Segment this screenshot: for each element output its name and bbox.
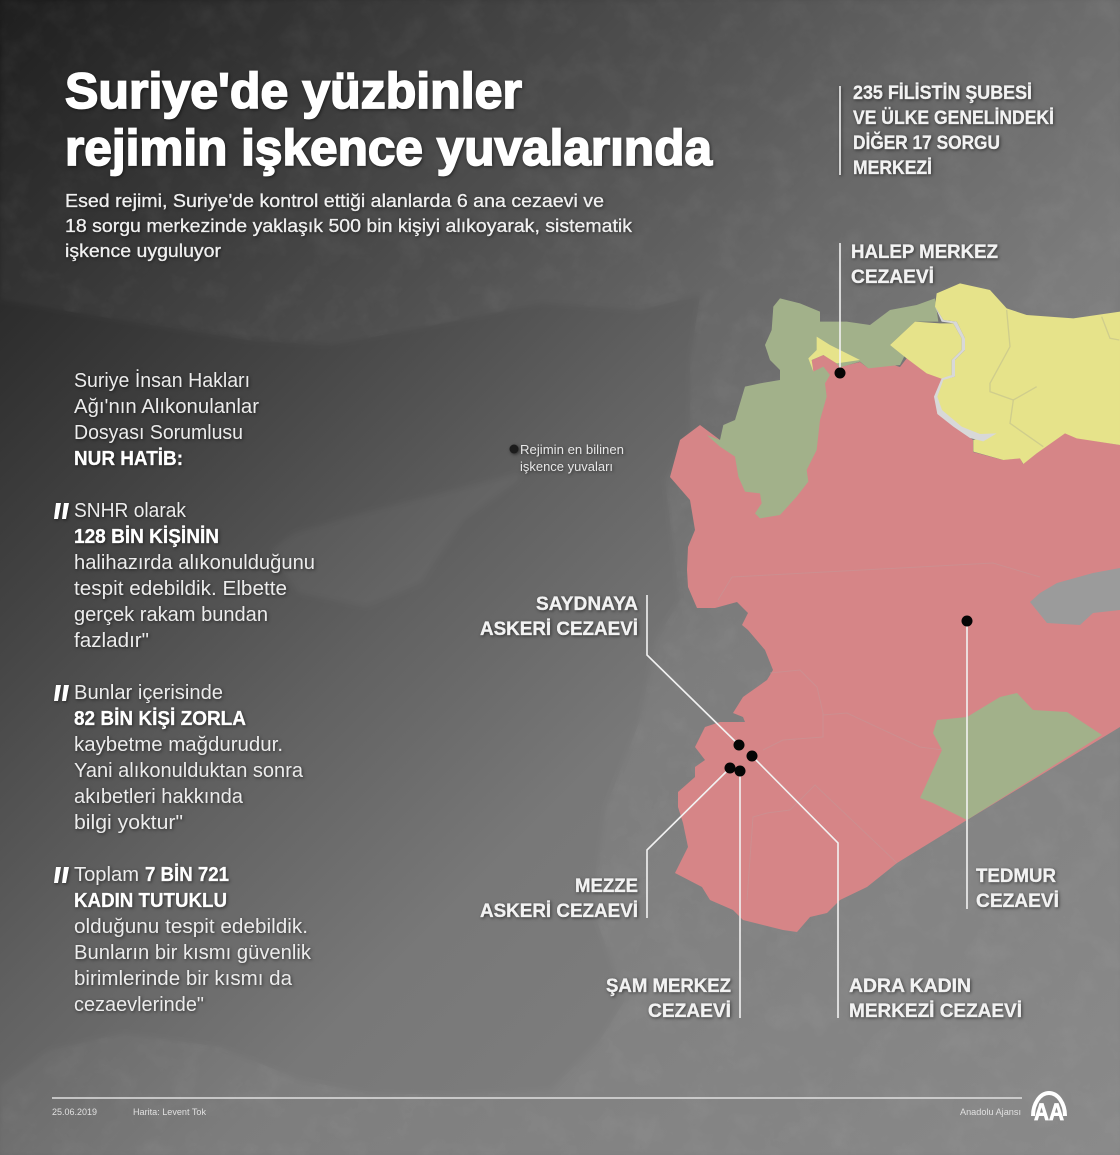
label: Saydnaya Askeri Cezaevi xyxy=(480,594,744,750)
label: Mezze Askeri Cezaevi: ASKERİ CEZAEVİ xyxy=(480,901,638,922)
label: Adra Kadın Merkezi Cezaevi: MERKEZİ CEZAEVİ xyxy=(849,1001,1022,1022)
region: eastern opposition area (green) xyxy=(920,693,1102,820)
title xyxy=(65,63,713,176)
legend: known torture sites: işkence yuvaları xyxy=(520,459,613,474)
quote: 128 bin: tespit edebildik. Elbette xyxy=(74,578,287,600)
callout: Filistin branch and interrogation centres: DİĞER 17 SORGU xyxy=(853,132,1000,154)
quote: 128 bin xyxy=(54,500,315,652)
quote: 7 bin 721: cezaevlerinde" xyxy=(74,994,204,1016)
label: Adra Kadın Merkezi Cezaevi xyxy=(746,750,1022,1022)
quote: 7 bin 721: KADIN TUTUKLU xyxy=(74,890,227,912)
quote: 128 bin: fazladır" xyxy=(74,630,149,652)
text block: source introduction: NUR HATİB: xyxy=(74,447,183,470)
label: Halep Merkez Cezaevi: HALEP MERKEZ xyxy=(851,242,998,263)
label: Mezze Askeri Cezaevi xyxy=(480,762,736,922)
region: regime-held area (red) xyxy=(670,355,1120,932)
label: Saydnaya Askeri Cezaevi: SAYDNAYA xyxy=(536,594,638,615)
label: Tedmur Cezaevi: CEZAEVİ xyxy=(976,891,1059,912)
quote: 7 bin 721: Toplam xyxy=(74,864,139,886)
region: lake and river (light grey) xyxy=(934,307,997,441)
callout: Filistin branch and interrogation centres xyxy=(840,83,1054,179)
quote: 128 bin: gerçek rakam bundan xyxy=(74,604,268,626)
label: Şam Merkez Cezaevi xyxy=(606,766,746,1022)
quote: 128 bin: 128 BİN KİŞİNİN xyxy=(74,525,219,548)
quote: 82 bin: kaybetme mağdurudur. xyxy=(74,734,283,756)
icon: quotation mark xyxy=(54,867,69,883)
subtitle: 18 sorgu merkezinde yaklaşık 500 bin kişiyi alıkoyarak, sistematik xyxy=(65,216,633,236)
label: Adra Kadın Merkezi Cezaevi: ADRA KADIN xyxy=(849,976,971,997)
footer: Anadolu Ajansı xyxy=(960,1107,1021,1118)
region: northern SDF areas (yellow) xyxy=(808,283,1120,464)
region: internal borders xyxy=(718,563,1040,900)
subtitle: Esed rejimi, Suriye'de kontrol ettiği alanlarda 6 ana cezaevi ve xyxy=(65,191,604,211)
quote: 7 bin 721: olduğunu tespit edebildik. xyxy=(74,916,308,938)
label: Şam Merkez Cezaevi: CEZAEVİ xyxy=(648,1001,731,1022)
footer: 25.06.2019 xyxy=(52,1107,97,1118)
quote: 82 bin: Bunlar içerisinde xyxy=(74,682,223,704)
legend: known torture sites xyxy=(510,442,624,474)
label: Mezze Askeri Cezaevi: MEZZE xyxy=(575,876,638,897)
subtitle: işkence uyguluyor xyxy=(65,241,221,261)
callout: Filistin branch and interrogation centres: VE ÜLKE GENELİNDEKİ xyxy=(853,108,1054,129)
footer: Harita: Levent Tok xyxy=(133,1107,206,1118)
region: internal borders in yellow area xyxy=(990,310,1119,447)
quote: 82 bin: Yani alıkonulduktan sonra xyxy=(74,760,304,782)
quote: 7 bin 721: birimlerinde bir kısmı da xyxy=(74,968,293,990)
region: grey central-east area xyxy=(1030,568,1120,625)
footer xyxy=(52,1093,1065,1126)
callout: Filistin branch and interrogation centres: MERKEZİ xyxy=(853,158,932,179)
quote: 7 bin 721: 7 BİN 721 xyxy=(145,863,229,886)
quote: 128 bin: halihazırda alıkonulduğunu xyxy=(74,552,315,574)
text block: source introduction: Ağı'nın Alıkonulanlar xyxy=(74,396,259,418)
label: Şam Merkez Cezaevi: ŞAM MERKEZ xyxy=(606,976,731,997)
text block: source introduction: Suriye İnsan Hakları xyxy=(74,369,250,392)
label: Halep Merkez Cezaevi xyxy=(834,242,998,378)
label: Tedmur Cezaevi xyxy=(962,616,1059,912)
icon: Anadolu Agency logo: AA xyxy=(1034,1099,1064,1126)
region: north-western opposition area (green) xyxy=(707,298,938,518)
label: Halep Merkez Cezaevi: CEZAEVİ xyxy=(851,267,934,288)
text block: source introduction xyxy=(74,369,259,470)
legend: known torture sites: Rejimin en bilinen xyxy=(520,442,624,457)
title: rejimin işkence yuvalarında xyxy=(65,120,713,176)
label: Saydnaya Askeri Cezaevi: ASKERİ CEZAEVİ xyxy=(480,619,638,640)
title: Suriye'de yüzbinler xyxy=(65,63,522,119)
quote: 128 bin: SNHR olarak xyxy=(74,500,187,522)
map: Syria control areas xyxy=(670,283,1120,932)
label: Tedmur Cezaevi: TEDMUR xyxy=(976,866,1056,887)
quote: 82 bin xyxy=(54,682,304,834)
quote: 7 bin 721: Bunların bir kısmı güvenlik xyxy=(74,942,312,964)
quote: 82 bin: bilgi yoktur" xyxy=(74,812,183,834)
quote: 7 bin 721 xyxy=(54,863,312,1016)
callout: Filistin branch and interrogation centres: 235 FİLİSTİN ŞUBESİ xyxy=(853,83,1032,104)
icon: quotation mark xyxy=(54,685,69,701)
quote: 82 bin: akıbetleri hakkında xyxy=(74,786,244,808)
quote: 82 bin: 82 BİN KİŞİ ZORLA xyxy=(74,707,246,730)
subtitle xyxy=(65,191,633,261)
icon: quotation mark xyxy=(54,503,69,519)
text block: source introduction: Dosyası Sorumlusu xyxy=(74,422,243,444)
